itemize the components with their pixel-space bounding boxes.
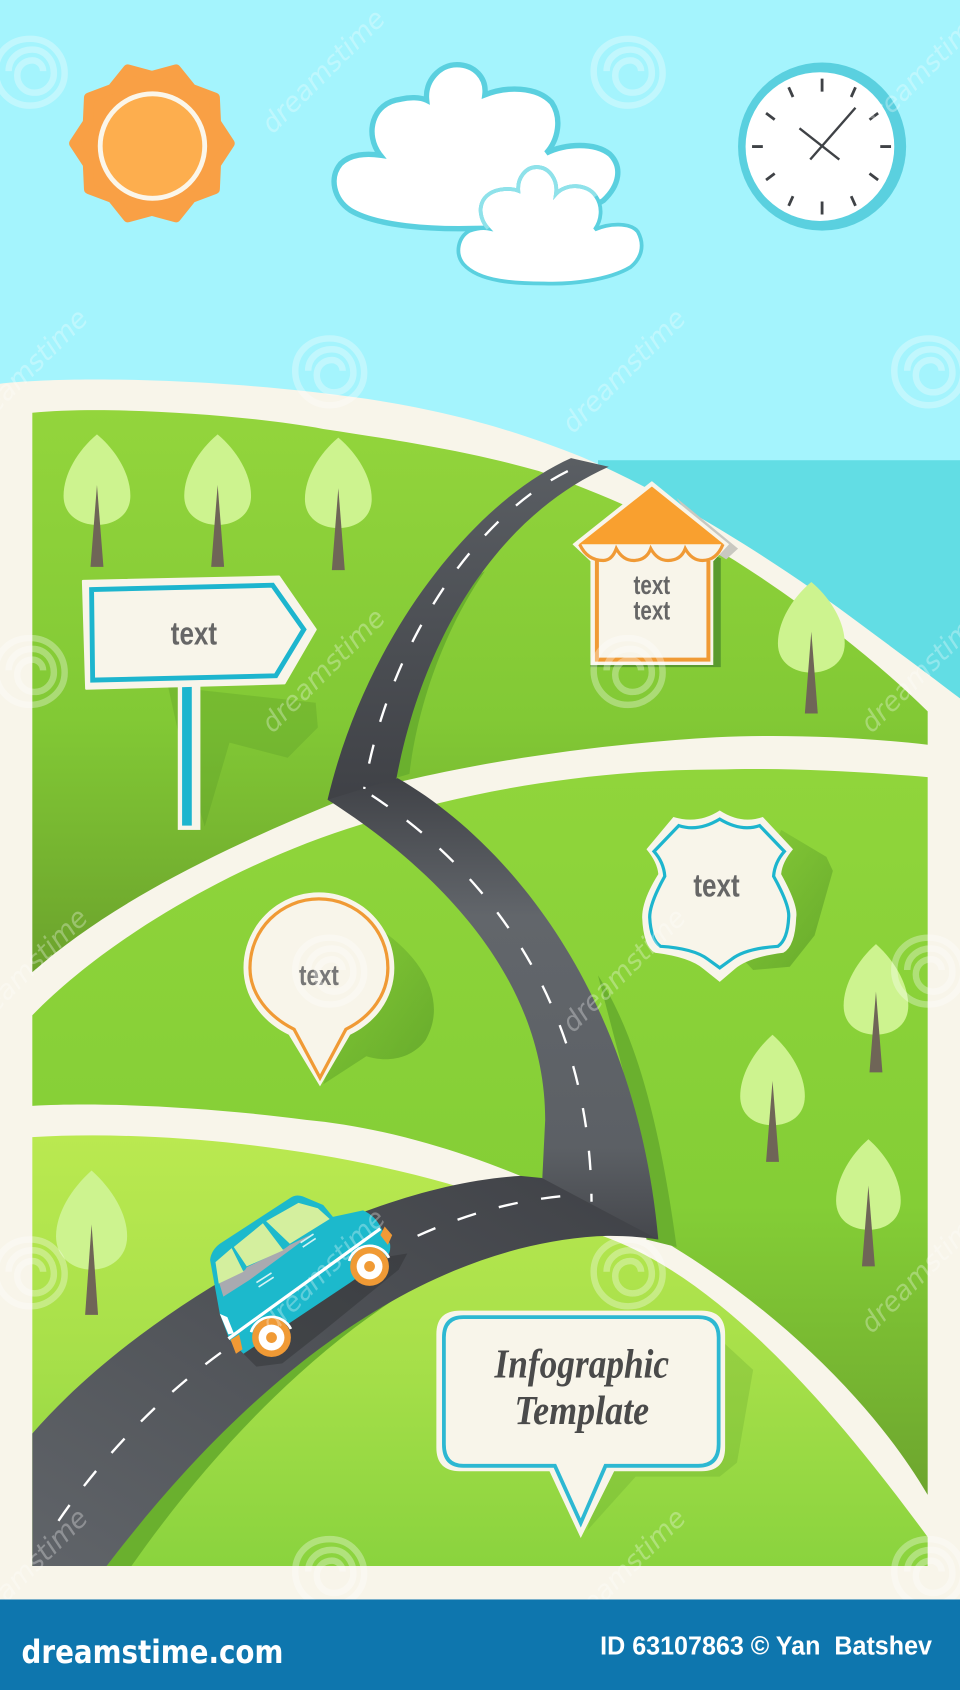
shield label — [642, 811, 833, 982]
road: middle section — [328, 778, 658, 1239]
tree — [305, 438, 372, 570]
house text: text — [634, 570, 670, 600]
cream land frame — [0, 379, 960, 1606]
house label — [573, 482, 738, 667]
icon: car — [210, 1196, 407, 1367]
icon: large cloud — [334, 65, 618, 229]
pin outer — [244, 892, 394, 1086]
tree — [64, 434, 130, 567]
footer credit text: ID 63107863 © Yan Batshev — [600, 1632, 933, 1660]
footer bar — [0, 1599, 960, 1690]
tree — [740, 1035, 805, 1162]
icon: small cloud — [458, 167, 642, 284]
road shadows — [107, 571, 677, 1566]
tree — [778, 582, 845, 714]
house roof — [573, 482, 728, 560]
watermark text: dreamstime — [256, 3, 392, 140]
car bumpers — [231, 1227, 392, 1354]
shield outer — [642, 811, 796, 982]
speech bubble title — [436, 1311, 753, 1538]
watermark text: dreamstime — [256, 1203, 392, 1339]
tree — [836, 1139, 901, 1266]
watermark text: dreamstime — [556, 902, 692, 1039]
bubble shadow — [587, 1331, 753, 1530]
bubble text: Infographic — [494, 1341, 669, 1386]
pin shadow — [323, 927, 434, 1084]
car front wheel — [350, 1247, 389, 1286]
icon: sun — [74, 70, 229, 217]
panel: upper field — [32, 410, 928, 972]
road: upper section — [328, 458, 609, 803]
road — [32, 458, 658, 1566]
signpost pole — [178, 685, 200, 830]
footer logo text: dreamstime.com — [22, 1633, 283, 1671]
pin text: text — [299, 960, 339, 992]
car trim — [228, 1229, 380, 1339]
car fenders — [251, 1246, 389, 1332]
house body — [590, 544, 713, 665]
car windows — [215, 1203, 330, 1284]
car headlight — [220, 1314, 234, 1334]
tree — [184, 434, 251, 567]
watermark text: dreamstime — [556, 303, 692, 439]
car body — [210, 1196, 390, 1354]
road: lower section — [32, 1176, 658, 1566]
car grey interior — [219, 1235, 310, 1297]
car rear wheel — [252, 1318, 291, 1357]
tree — [56, 1170, 127, 1315]
panel: lower hill — [32, 1135, 928, 1566]
watermark text: dreamstime — [256, 603, 392, 739]
house shadow — [590, 498, 738, 667]
panel: middle field — [32, 769, 928, 1495]
house label: text — [634, 596, 670, 626]
signpost shadow — [168, 687, 318, 827]
house awning — [580, 544, 723, 560]
shield shadow — [733, 830, 833, 970]
location pin label — [244, 892, 434, 1086]
signpost text: text — [171, 616, 217, 652]
signpost — [83, 577, 318, 830]
car shadow — [244, 1253, 407, 1367]
sea — [598, 460, 960, 784]
watermark text: dreamstime — [556, 1503, 692, 1639]
road: centre dashes — [48, 471, 592, 1536]
bubble outer — [436, 1311, 725, 1538]
speech bubble title: Template — [514, 1388, 649, 1433]
signpost board — [83, 577, 316, 689]
tree — [844, 944, 908, 1072]
shield text: text — [693, 868, 740, 904]
icon: clock — [738, 63, 906, 231]
